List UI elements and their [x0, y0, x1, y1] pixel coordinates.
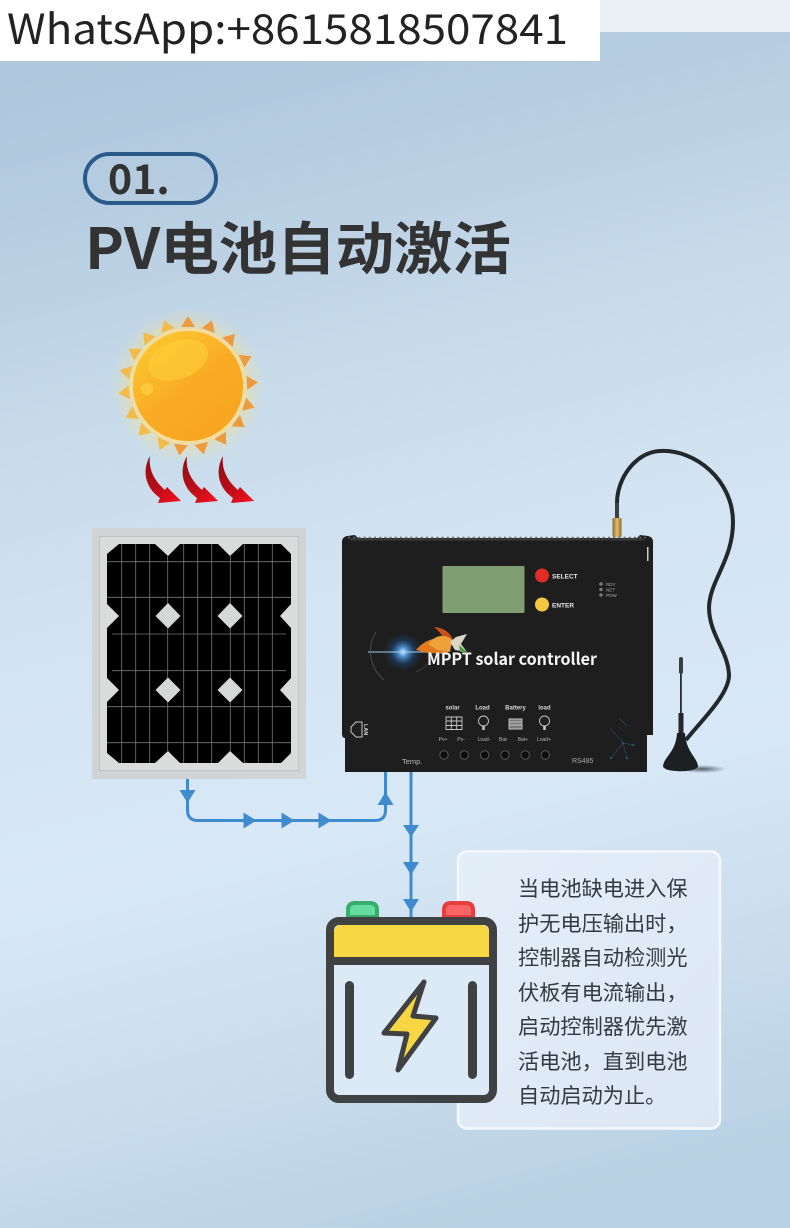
logo text: MPPT solar controller: [427, 646, 598, 670]
port labels: load: [538, 706, 551, 712]
port labels: solar: [445, 706, 460, 712]
port labels: Load: [475, 706, 490, 712]
callout card: 伏板有电流输出，: [518, 981, 688, 1005]
terminal labels: Load-: [478, 737, 491, 743]
battery terminals: [348, 903, 473, 917]
terminal labels: Pv+: [439, 737, 447, 743]
callout card: [458, 852, 720, 1128]
icon: lightning bolt: [384, 982, 436, 1070]
status LEDs: POW: [606, 593, 618, 598]
section number badge: [85, 146, 216, 206]
temp label: Temp.: [402, 757, 422, 766]
battery: [330, 903, 493, 1099]
status LEDs: [599, 582, 618, 598]
enter button: ENTER: [552, 602, 574, 610]
title: PV电池自动激活: [85, 204, 511, 286]
status LEDs: NET: [606, 588, 615, 592]
logo flare: [368, 632, 437, 680]
select button: SELECT: [552, 574, 578, 580]
callout card: 护无电压输出时，: [518, 912, 688, 936]
terminal labels: Pv-: [457, 737, 465, 743]
terminal labels: Load+: [537, 737, 551, 743]
LAN port: [351, 722, 368, 737]
LCD screen: [442, 566, 524, 613]
port labels: Battery: [505, 706, 526, 712]
status LEDs: RDY: [606, 582, 616, 587]
callout card: 控制器自动检测光: [518, 946, 688, 970]
terminal labels: Bat+: [518, 737, 528, 743]
callout card: 自动启动为止。: [518, 1084, 666, 1108]
callout card: 启动控制器优先激: [518, 1015, 688, 1039]
battery body: [330, 921, 493, 1099]
flow lines: panel to controller: [180, 772, 394, 828]
logo swirl: [416, 627, 467, 654]
LAN port: LAN: [362, 724, 368, 735]
antenna with cable: [612, 451, 733, 773]
icon: red sunlight arrows: [146, 456, 254, 503]
controller body: [342, 535, 653, 772]
terminals: [440, 751, 550, 759]
port icons: [446, 716, 550, 730]
callout card: 活电池，直到电池: [518, 1050, 688, 1074]
flow line: controller to battery: [403, 772, 419, 917]
select button: [535, 568, 578, 582]
constellation decoration: [610, 718, 634, 759]
battery bars: [345, 981, 477, 1079]
battery cap: [334, 925, 489, 961]
solar controller: [342, 535, 653, 772]
terminal labels: [439, 737, 551, 743]
terminal labels: Bat-: [499, 737, 508, 743]
solar panel: [92, 528, 306, 779]
port labels: [445, 706, 551, 712]
section number badge: 01.: [108, 146, 170, 206]
enter button: [535, 598, 574, 612]
icon: sun: [110, 308, 266, 464]
callout card: 当电池缺电进入保: [518, 877, 688, 901]
top right light strip: [600, 0, 790, 32]
RS485 label: RS485: [572, 758, 594, 765]
